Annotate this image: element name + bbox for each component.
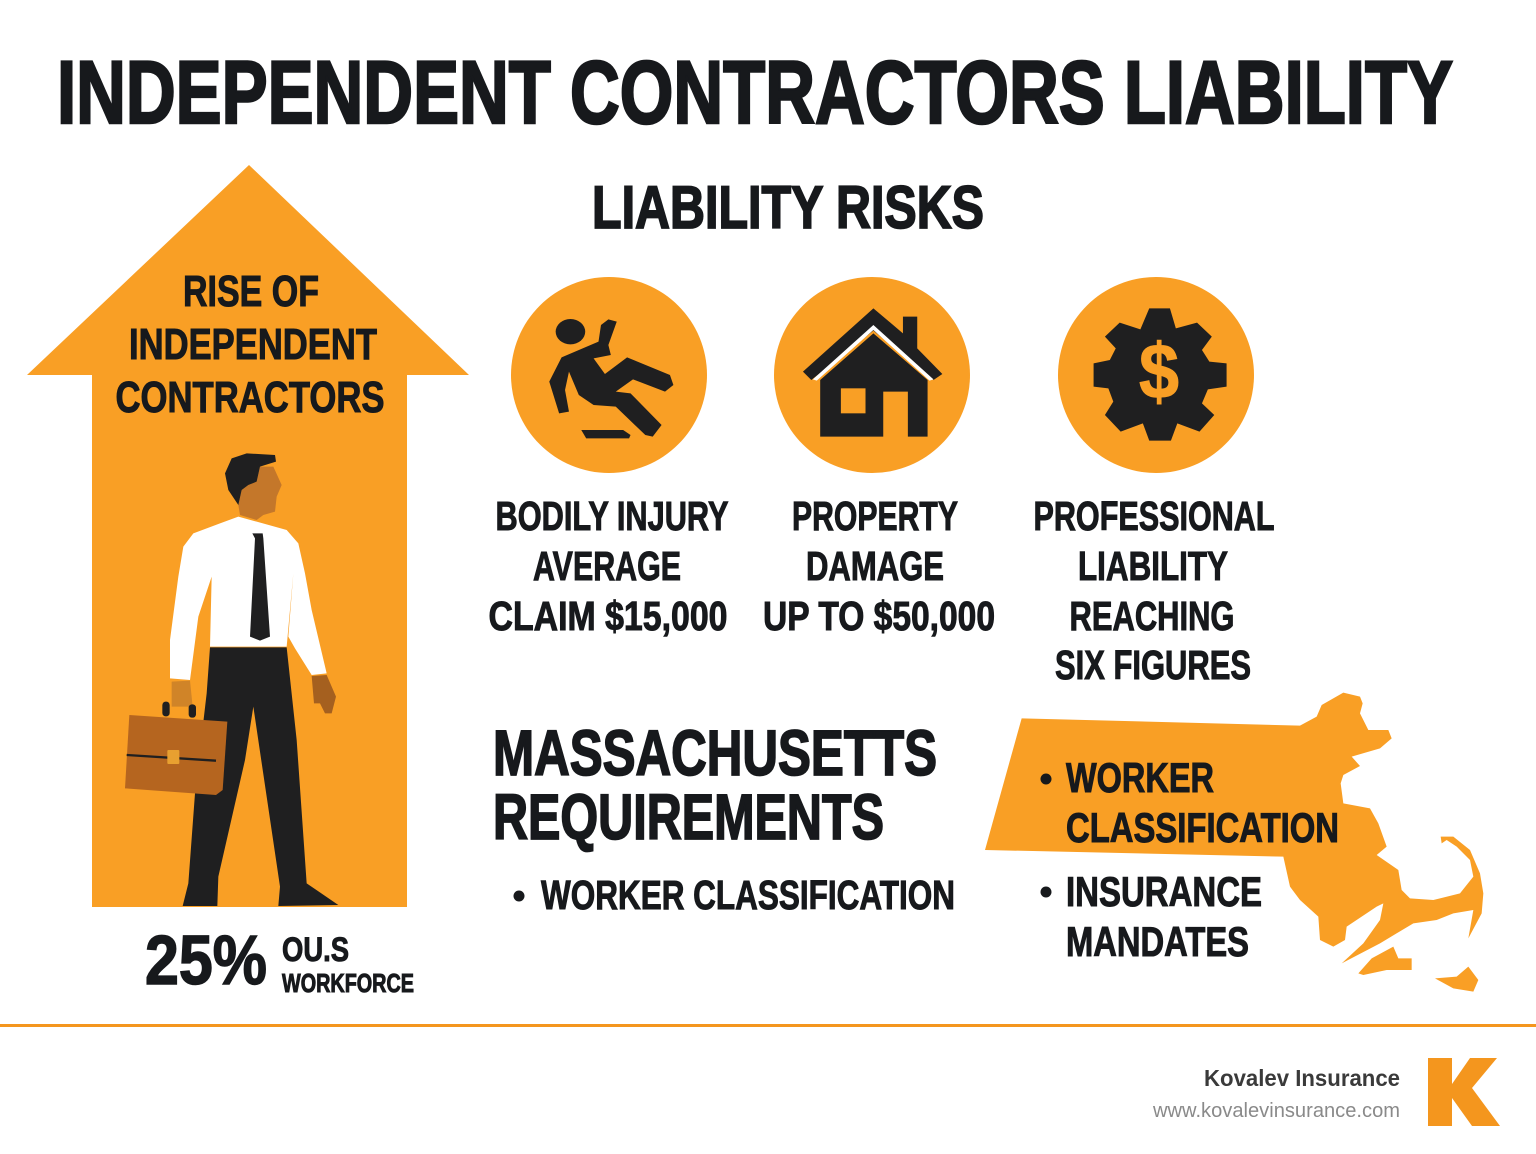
bullet: worker classification: WORKER CLASSIFICATION (541, 872, 955, 918)
heading: liability risks: LIABILITY RISKS (592, 174, 984, 241)
map: islands (1358, 947, 1478, 992)
footer: brand text: www.kovalevinsurance.com (1152, 1100, 1400, 1122)
label (488, 493, 728, 639)
stat: 25% of U.S. workforce: 25% (145, 921, 267, 999)
bullet: worker classification on map (1040, 754, 1339, 851)
bullet: insurance mandates: INSURANCE (1066, 868, 1262, 915)
heading: Massachusetts requirements: MASSACHUSETTS (493, 717, 937, 789)
bullet: worker classification on map: WORKER (1066, 754, 1214, 801)
icon: gear with dollar: $ (1139, 327, 1179, 415)
stat: 25% of U.S. workforce: WORKFORCE (282, 968, 414, 998)
icon: house (774, 277, 970, 473)
icon: gear with dollar (1058, 277, 1254, 473)
label: LIABILITY (1078, 543, 1228, 589)
panel: property damage (763, 277, 995, 639)
figure: businessman with briefcase (125, 453, 338, 906)
stat: 25% of U.S. workforce (145, 921, 414, 999)
bullet: worker classification on map: CLASSIFICATION (1066, 804, 1339, 851)
label: CLAIM $15,000 (488, 593, 728, 639)
label: DAMAGE (806, 543, 944, 589)
label: PROFESSIONAL (1034, 493, 1274, 539)
label: PROPERTY (792, 493, 958, 539)
bullet: insurance mandates: MANDATES (1066, 918, 1249, 965)
footer: brand text (1152, 1065, 1400, 1122)
label: BODILY INJURY (496, 493, 728, 539)
bullet: insurance mandates (1040, 868, 1262, 965)
arrow (27, 165, 469, 907)
stat: 25% of U.S. workforce: OU.S (282, 931, 349, 969)
arrow heading: RISE OF (183, 267, 319, 316)
arrow heading (116, 267, 384, 422)
panel: rise of independent contractors arrow (27, 165, 469, 907)
label: UP TO $50,000 (763, 593, 995, 639)
label: AVERAGE (533, 543, 681, 589)
map: Massachusetts (985, 693, 1483, 963)
label (763, 493, 995, 639)
label: REACHING (1070, 593, 1234, 639)
heading: Massachusetts requirements: REQUIREMENTS (493, 781, 884, 853)
label: SIX FIGURES (1055, 642, 1251, 688)
footer: brand text: Kovalev Insurance (1204, 1065, 1400, 1091)
icon: slipping person (511, 277, 707, 473)
panel: bodily injury (488, 277, 728, 639)
logo: K mark (1428, 1058, 1500, 1126)
arrow heading: INDEPENDENT (129, 320, 377, 369)
label (1034, 493, 1274, 688)
arrow heading: CONTRACTORS (116, 373, 384, 422)
panel: professional liability (1034, 277, 1274, 688)
heading: Massachusetts requirements (493, 717, 937, 853)
